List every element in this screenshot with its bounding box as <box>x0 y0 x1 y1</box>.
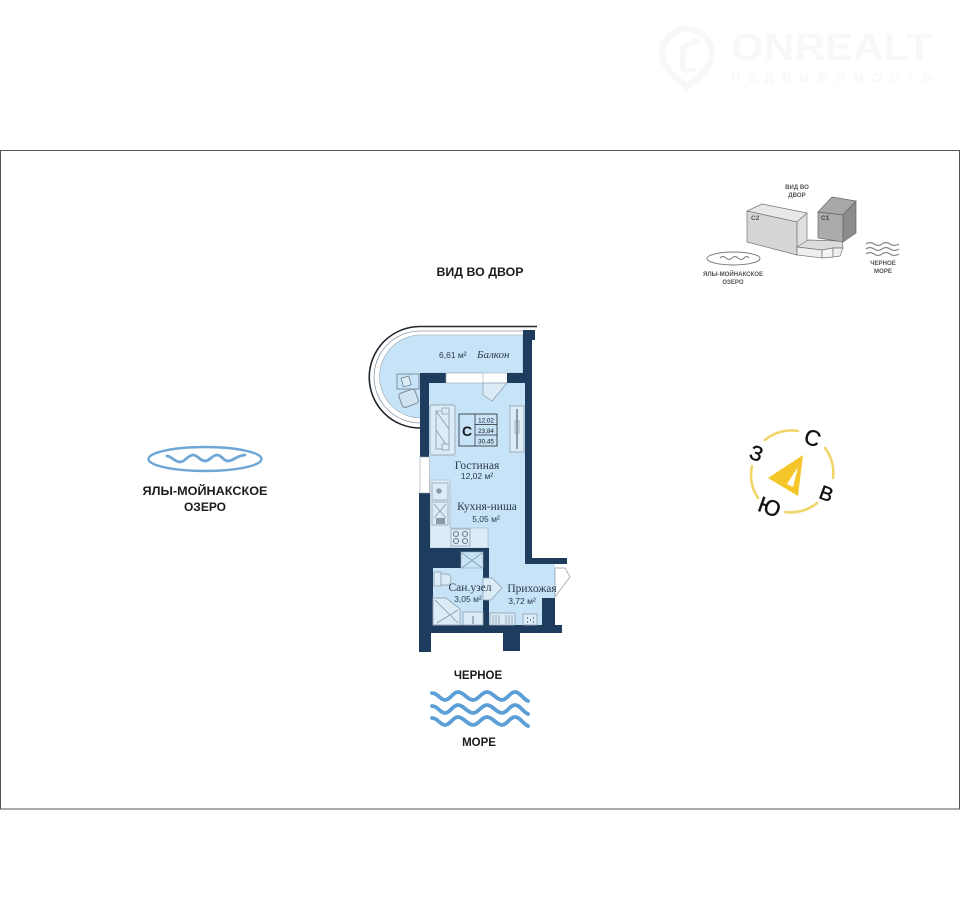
balcony furniture <box>397 374 419 408</box>
label: view to yard: ДВОР <box>788 192 806 199</box>
small lake icon <box>707 252 760 265</box>
sofa <box>430 405 455 455</box>
watermark logo <box>659 26 932 91</box>
building key diagram <box>703 184 899 286</box>
balcony <box>369 326 537 428</box>
lake icon <box>148 447 262 471</box>
north: С <box>801 423 824 452</box>
bathroom fill <box>433 568 483 625</box>
apartment legend <box>459 414 497 446</box>
heading: courtyard view: ВИД ВО ДВОР <box>436 267 524 279</box>
hall furniture <box>490 613 537 625</box>
area: hall: 3,72 м² <box>508 596 536 606</box>
label: lake: ОЗЕРО <box>184 500 226 514</box>
watermark logo: НЕДВИЖИМОСТЬ <box>731 70 932 85</box>
kitchen appliances <box>432 483 470 546</box>
walls <box>420 330 567 564</box>
bathroom door <box>483 578 502 600</box>
area: bathroom: 3,05 м² <box>454 594 482 604</box>
balcony label: Балкон <box>476 349 510 361</box>
west: З <box>746 441 766 467</box>
compass ring <box>751 430 833 512</box>
compass arrow <box>768 455 803 496</box>
window and shaft <box>420 373 483 568</box>
entry door <box>555 568 570 597</box>
label: lake: ЯЛЫ-МОЙНАКСКОЕ <box>703 270 763 278</box>
label: sea: МОРЕ <box>874 268 892 275</box>
compass <box>746 423 836 523</box>
areas: 30,45 <box>478 438 494 446</box>
type letter: C <box>462 423 472 439</box>
balcony area: 6,61 м² <box>439 350 467 360</box>
label: lake: ОЗЕРО <box>722 279 744 286</box>
room label: living room: Гостиная <box>455 460 500 472</box>
label: black: ЧЕРНОЕ <box>454 670 502 682</box>
podium <box>797 240 843 258</box>
floor plan <box>369 326 570 652</box>
small sea icon <box>866 242 899 256</box>
label: lake: ЯЛЫ-МОЙНАКСКОЕ <box>142 483 268 498</box>
label: sea: ЧЕРНОЕ <box>870 260 896 267</box>
east: В <box>816 482 836 507</box>
area: kitchen: 5,05 м² <box>472 514 500 524</box>
building C1: C1 <box>821 215 830 222</box>
building C1 <box>818 197 856 242</box>
TV unit <box>510 406 524 452</box>
areas: 12,02 <box>478 418 494 424</box>
room label: bathroom: Сан.узел <box>449 582 492 594</box>
kitchen counter <box>430 480 488 548</box>
rooms fill <box>429 383 555 625</box>
room label: hall: Прихожая <box>507 583 557 595</box>
building C2 <box>747 204 807 255</box>
area: living room: 12,02 м² <box>461 471 493 481</box>
balcony door <box>483 383 507 401</box>
areas: 23,84 <box>478 428 494 435</box>
label: sea: МОРЕ <box>462 737 496 749</box>
south: Ю <box>755 491 784 523</box>
bathroom fixtures <box>433 572 483 625</box>
building C2: C2 <box>751 215 760 222</box>
frame <box>0 150 960 809</box>
label: view to yard: ВИД ВО <box>785 184 809 191</box>
sea waves <box>432 692 528 726</box>
lower walls <box>419 493 562 652</box>
watermark logo: ONREALT <box>731 27 932 69</box>
room label: kitchen: Кухня-ниша <box>457 501 517 513</box>
